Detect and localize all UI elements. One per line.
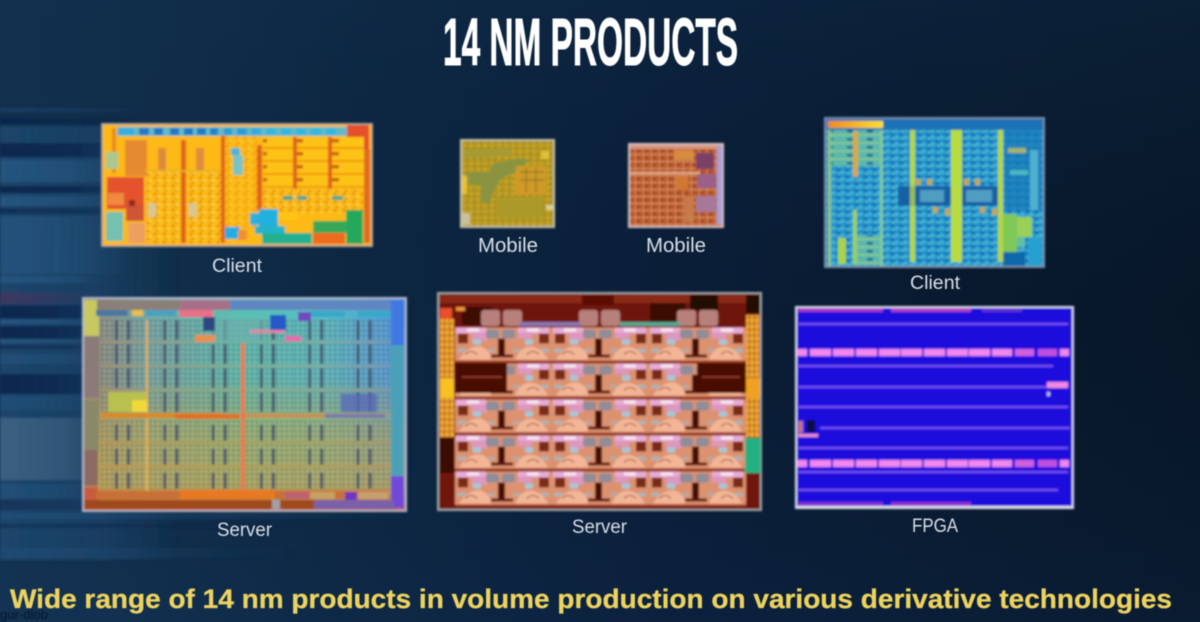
thin lines bbox=[798, 323, 1070, 491]
red block bbox=[107, 177, 144, 209]
upper mini tiles bbox=[481, 310, 718, 326]
right strip bbox=[746, 315, 760, 437]
watermark: gur-diob bbox=[0, 607, 48, 622]
chip die: client orange bbox=[101, 123, 373, 247]
tile array bbox=[455, 326, 746, 506]
left cache area bbox=[828, 130, 882, 166]
top band bbox=[826, 119, 1043, 130]
yellow block bbox=[108, 392, 146, 412]
dashed band upper bbox=[797, 349, 1069, 356]
chip die: server rainbow bbox=[82, 297, 407, 512]
tile grids bbox=[101, 320, 391, 415]
dashed band lower bbox=[797, 460, 1069, 467]
label: mobile: Mobile bbox=[478, 235, 538, 257]
text: 14 NM PRODUCTS bbox=[443, 5, 738, 80]
orange vertical rails bbox=[181, 140, 186, 243]
label: server: Server bbox=[572, 517, 628, 538]
blue blobs bbox=[231, 148, 240, 155]
left motion streaks bbox=[0, 108, 420, 560]
right region bbox=[1004, 130, 1042, 210]
left edge bbox=[84, 300, 99, 336]
core meshes bbox=[147, 172, 221, 243]
center rails bbox=[146, 320, 148, 495]
chip die: FPGA bbox=[795, 306, 1074, 509]
bottom band bbox=[96, 491, 386, 499]
green and orange blocks bbox=[313, 221, 349, 233]
label: client: Client bbox=[212, 256, 263, 277]
top blue cell band bbox=[117, 127, 347, 136]
top strip bbox=[439, 295, 760, 303]
label: client: Client bbox=[910, 273, 961, 294]
magenta edge strips bbox=[798, 308, 883, 312]
chip die: client blue bbox=[824, 117, 1045, 268]
right block bbox=[1047, 382, 1068, 388]
purple patch bbox=[341, 394, 377, 412]
label: server: Server bbox=[217, 520, 273, 541]
cache rows bbox=[263, 137, 293, 189]
mid orange band bbox=[101, 413, 221, 418]
light panels bbox=[106, 152, 118, 169]
yellow-green rails bbox=[910, 130, 915, 262]
label: FPGA: FPGA bbox=[912, 516, 958, 537]
dark notches bbox=[455, 363, 507, 393]
red corner bbox=[347, 125, 369, 149]
chip die: mobile olive bbox=[460, 139, 555, 228]
left strip bbox=[440, 319, 454, 437]
chip die: mobile rust bbox=[628, 143, 724, 228]
orange dots bbox=[916, 179, 921, 185]
dark band bbox=[898, 186, 1002, 206]
left marker bbox=[798, 421, 803, 433]
right edge bbox=[391, 300, 404, 345]
label: mobile: Mobile bbox=[646, 235, 706, 257]
top band bbox=[97, 300, 207, 310]
bottom tagline: Wide range of 14 nm products in volume production on various derivative technologies bbox=[10, 584, 1172, 614]
chip die: server tiled bbox=[437, 292, 762, 511]
